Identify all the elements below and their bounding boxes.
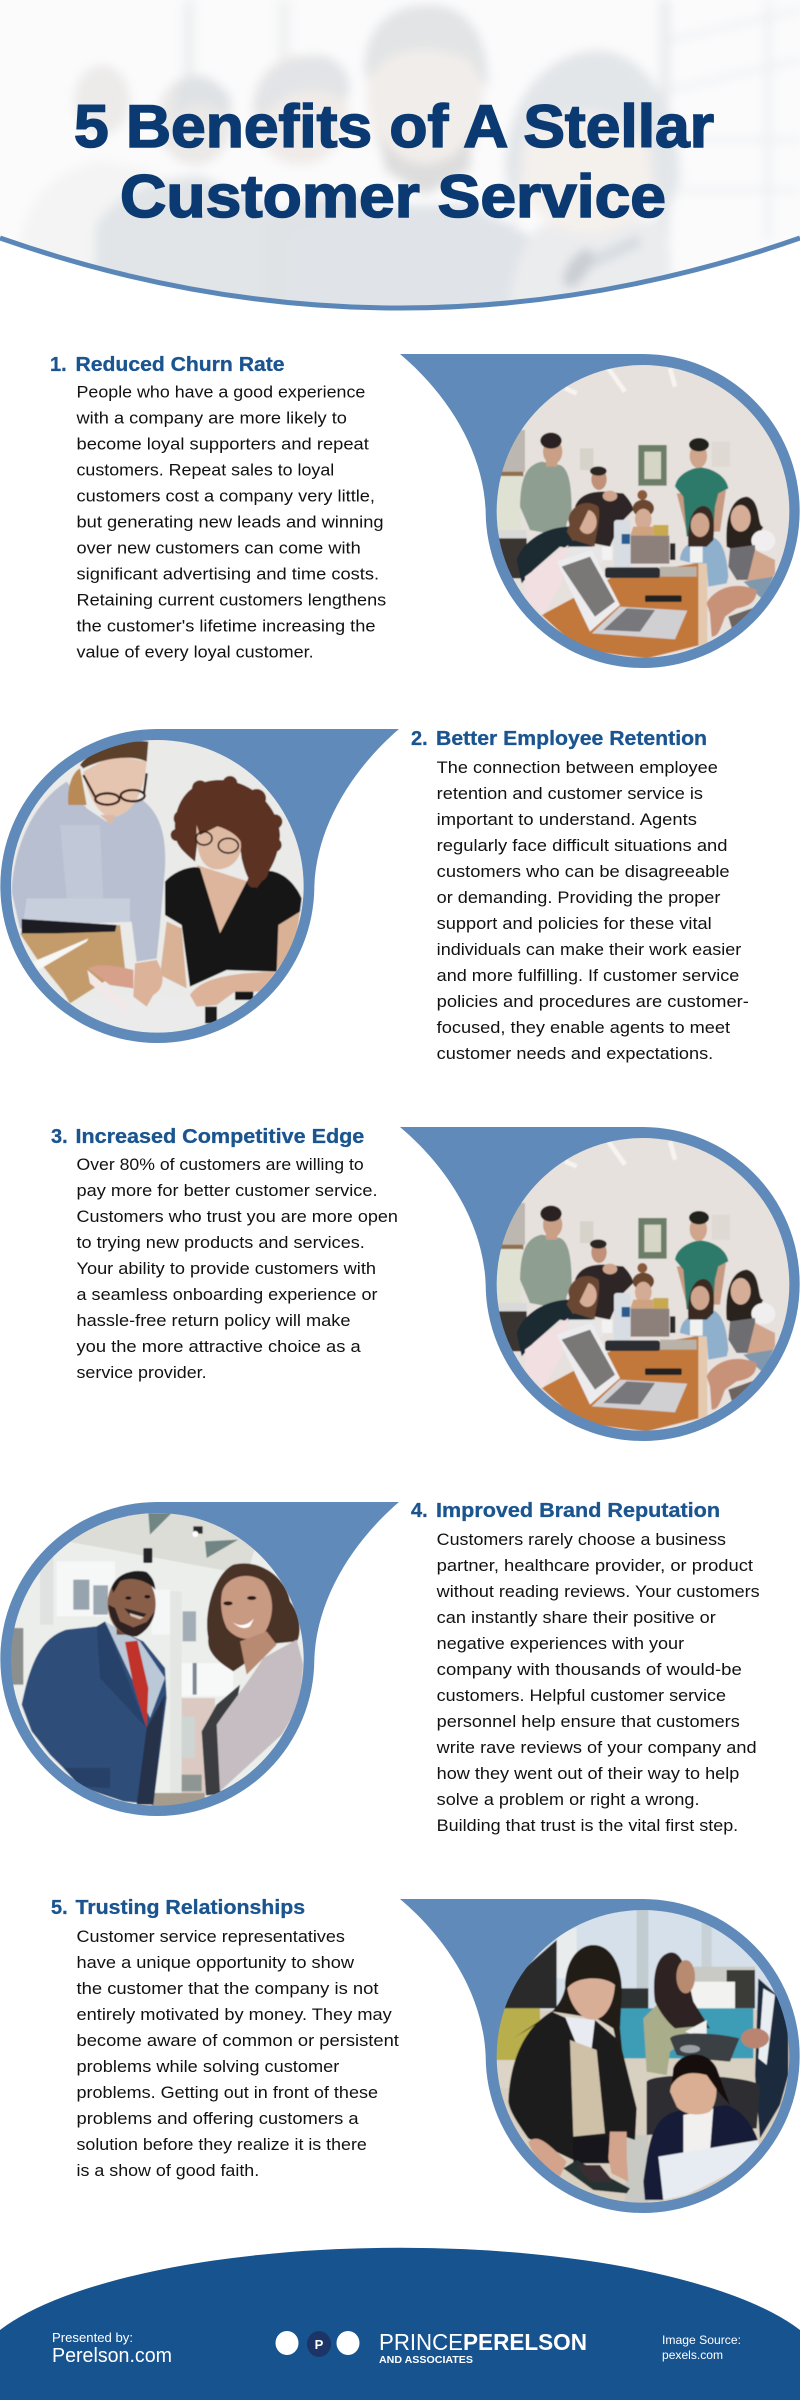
- body text 3: Your ability to provide customers with: [76, 1259, 376, 1278]
- logo: prince perelson: [276, 2329, 587, 2366]
- body text 4: negative experiences with your: [437, 1634, 684, 1653]
- header banner photo: [22, 0, 792, 306]
- footer blue band: [0, 2248, 800, 2400]
- presented by credit: Perelson.com: [52, 2345, 172, 2367]
- body text 1: become loyal supporters and repeat: [76, 434, 369, 454]
- body text 4: Building that trust is the vital first step.: [437, 1816, 738, 1835]
- body text 3: hassle-free return policy will make: [76, 1311, 350, 1330]
- body text 5: is a show of good faith.: [76, 2161, 259, 2180]
- body text 5: problems and offering customers a: [76, 2109, 359, 2128]
- title: Customer Service: [120, 163, 666, 230]
- body text 4: without reading reviews. Your customers: [436, 1582, 760, 1601]
- body text 2: The connection between employee: [437, 758, 718, 777]
- body text 4: can instantly share their positive or: [437, 1608, 716, 1627]
- body text 4: write rave reviews of your company and: [436, 1738, 757, 1757]
- image source credit: pexels.com: [662, 2348, 723, 2362]
- body text 4: [436, 1530, 760, 1835]
- body text 4: customers. Helpful customer service: [437, 1686, 726, 1705]
- body text 1: significant advertising and time costs.: [76, 564, 379, 584]
- body text 4: Customers rarely choose a business: [437, 1530, 726, 1549]
- heading 1: 1.: [50, 354, 67, 376]
- body text 2: support and policies for these vital: [437, 914, 712, 933]
- body text 1: Retaining current customers lengthens: [76, 590, 386, 610]
- photo: business man and woman in blue teardrop: [0, 1498, 399, 1818]
- body text 3: a seamless onboarding experience or: [76, 1285, 378, 1304]
- heading 4: Improved Brand Reputation: [436, 1500, 720, 1522]
- logo: prince perelson: PERELSON: [463, 2329, 587, 2355]
- logo: prince perelson: P: [315, 2337, 324, 2352]
- body text 4: how they went out of their way to help: [437, 1764, 739, 1783]
- presented by credit: Presented by:: [52, 2330, 133, 2345]
- photo: team around laptops in blue teardrop: [400, 350, 800, 670]
- heading 1: Reduced Churn Rate: [76, 354, 284, 376]
- body text 1: value of every loyal customer.: [76, 642, 314, 662]
- body text 2: policies and procedures are customer-: [437, 992, 749, 1011]
- body text 1: customers cost a company very little,: [76, 486, 375, 506]
- heading 4: 4.: [411, 1500, 428, 1522]
- body text 1: customers. Repeat sales to loyal: [76, 460, 334, 480]
- heading 5: 5.: [51, 1897, 68, 1919]
- logo: prince perelson: PRINCE: [379, 2329, 463, 2355]
- body text 2: regularly face difficult situations and: [437, 836, 728, 855]
- logo: prince perelson: AND ASSOCIATES: [379, 2355, 473, 2366]
- body text 4: personnel help ensure that customers: [437, 1712, 740, 1731]
- section 4: improved brand reputation: [0, 1498, 760, 1835]
- heading 2: 2.: [411, 728, 428, 750]
- footer: [0, 2248, 800, 2400]
- presented by credit: [52, 2330, 172, 2367]
- image source credit: [662, 2333, 741, 2362]
- body text 2: or demanding. Providing the proper: [437, 888, 721, 907]
- body text 2: and more fulfilling. If customer service: [437, 966, 739, 985]
- body text 3: to trying new products and services.: [76, 1233, 365, 1252]
- body text 5: solution before they realize it is there: [76, 2135, 367, 2154]
- body text 1: over new customers can come with: [76, 538, 361, 558]
- title: [74, 93, 714, 230]
- body text 5: entirely motivated by money. They may: [76, 2005, 392, 2024]
- body text 5: become aware of common or persistent: [76, 2031, 399, 2050]
- section 5: trusting relationships: [51, 1895, 800, 2215]
- body text 2: important to understand. Agents: [437, 810, 697, 829]
- body text 1: with a company are more likely to: [75, 408, 347, 428]
- heading 3: 3.: [51, 1126, 68, 1148]
- body text 3: Over 80% of customers are willing to: [76, 1155, 364, 1174]
- body text 1: the customer's lifetime increasing the: [76, 616, 376, 636]
- body text 4: solve a problem or right a wrong.: [437, 1790, 700, 1809]
- body text 2: customer needs and expectations.: [437, 1044, 713, 1063]
- body text 3: pay more for better customer service.: [76, 1181, 378, 1200]
- body text 2: customers who can be disagreeable: [437, 862, 730, 881]
- body text 1: People who have a good experience: [76, 382, 365, 402]
- photo: team around laptops in blue teardrop (repeat): [400, 1123, 800, 1443]
- section 2: better employee retention: [0, 725, 749, 1063]
- body text 5: Customer service representatives: [76, 1927, 345, 1946]
- heading 3: Increased Competitive Edge: [76, 1126, 364, 1148]
- body text 5: the customer that the company is not: [76, 1979, 379, 1998]
- body text 2: individuals can make their work easier: [437, 940, 742, 959]
- title: 5 Benefits of A Stellar: [74, 93, 714, 160]
- section 1: reduced churn rate: [50, 350, 800, 670]
- heading 2: Better Employee Retention: [436, 728, 707, 750]
- heading 5: Trusting Relationships: [76, 1897, 305, 1919]
- body text 2: retention and customer service is: [437, 784, 703, 803]
- body text 1: [75, 382, 386, 662]
- body text 5: problems. Getting out in front of these: [76, 2083, 378, 2102]
- body text 5: have a unique opportunity to show: [76, 1953, 355, 1972]
- body text 3: [76, 1155, 398, 1382]
- body text 1: but generating new leads and winning: [76, 512, 384, 532]
- header curve line: [0, 238, 800, 308]
- body text 3: service provider.: [76, 1363, 207, 1382]
- body text 3: you the more attractive choice as a: [76, 1337, 361, 1356]
- photo: two women reviewing paperwork in blue teardrop: [0, 725, 399, 1045]
- body text 3: Customers who trust you are more open: [76, 1207, 398, 1226]
- body text 4: company with thousands of would-be: [437, 1660, 742, 1679]
- body text 5: problems while solving customer: [76, 2057, 340, 2076]
- body text 4: partner, healthcare provider, or product: [437, 1556, 753, 1575]
- body text 2: [437, 758, 749, 1063]
- image source credit: Image Source:: [662, 2333, 741, 2347]
- body text 2: focused, they enable agents to meet: [437, 1018, 730, 1037]
- section 3: increased competitive edge: [51, 1123, 800, 1443]
- photo: office colleagues in blue teardrop: [400, 1895, 800, 2215]
- body text 5: [76, 1927, 399, 2180]
